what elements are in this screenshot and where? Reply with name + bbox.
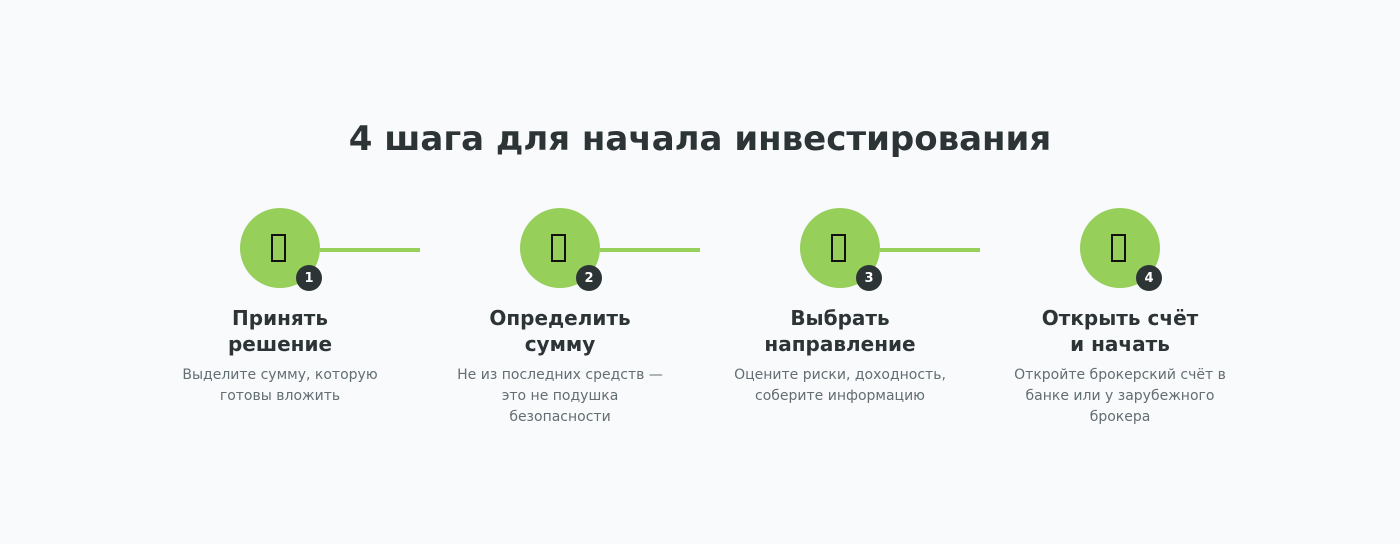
description: Оцените риски, доходность, соберите информацию bbox=[734, 367, 946, 404]
description: Откройте брокерский счёт в банке или у зарубежного брокера bbox=[1014, 367, 1226, 425]
badge 3 bbox=[856, 265, 882, 291]
badge 2 bbox=[576, 265, 602, 291]
badge 2: 2 bbox=[584, 271, 594, 286]
step 4 bbox=[1014, 208, 1226, 425]
heading: направление bbox=[764, 332, 916, 356]
title: 4 шага для начала инвестирования bbox=[349, 119, 1051, 159]
step 2 bbox=[457, 208, 700, 425]
heading bbox=[228, 306, 332, 356]
description: Не из последних средств — это не подушка безопасности bbox=[457, 367, 663, 425]
heading bbox=[764, 306, 916, 356]
heading: Открыть счёт bbox=[1042, 306, 1198, 330]
badge 3: 3 bbox=[864, 271, 874, 286]
connector line bbox=[880, 248, 980, 252]
icon circle bbox=[800, 208, 880, 288]
heading: Принять bbox=[232, 306, 328, 330]
step 3 bbox=[734, 208, 980, 404]
connector line bbox=[600, 248, 700, 252]
icon circle bbox=[1080, 208, 1160, 288]
step 1 bbox=[182, 208, 420, 404]
badge 1: 1 bbox=[304, 271, 314, 286]
heading: Определить bbox=[489, 306, 631, 330]
icon circle bbox=[520, 208, 600, 288]
heading bbox=[1042, 306, 1198, 356]
connector line bbox=[320, 248, 420, 252]
badge 4 bbox=[1136, 265, 1162, 291]
heading: решение bbox=[228, 332, 332, 356]
heading: сумму bbox=[525, 332, 595, 356]
description: Выделите сумму, которую готовы вложить bbox=[182, 367, 378, 404]
icon circle bbox=[240, 208, 320, 288]
badge 1 bbox=[296, 265, 322, 291]
heading bbox=[489, 306, 631, 356]
heading: и начать bbox=[1070, 332, 1170, 356]
badge 4: 4 bbox=[1144, 271, 1154, 286]
heading: Выбрать bbox=[790, 306, 890, 330]
